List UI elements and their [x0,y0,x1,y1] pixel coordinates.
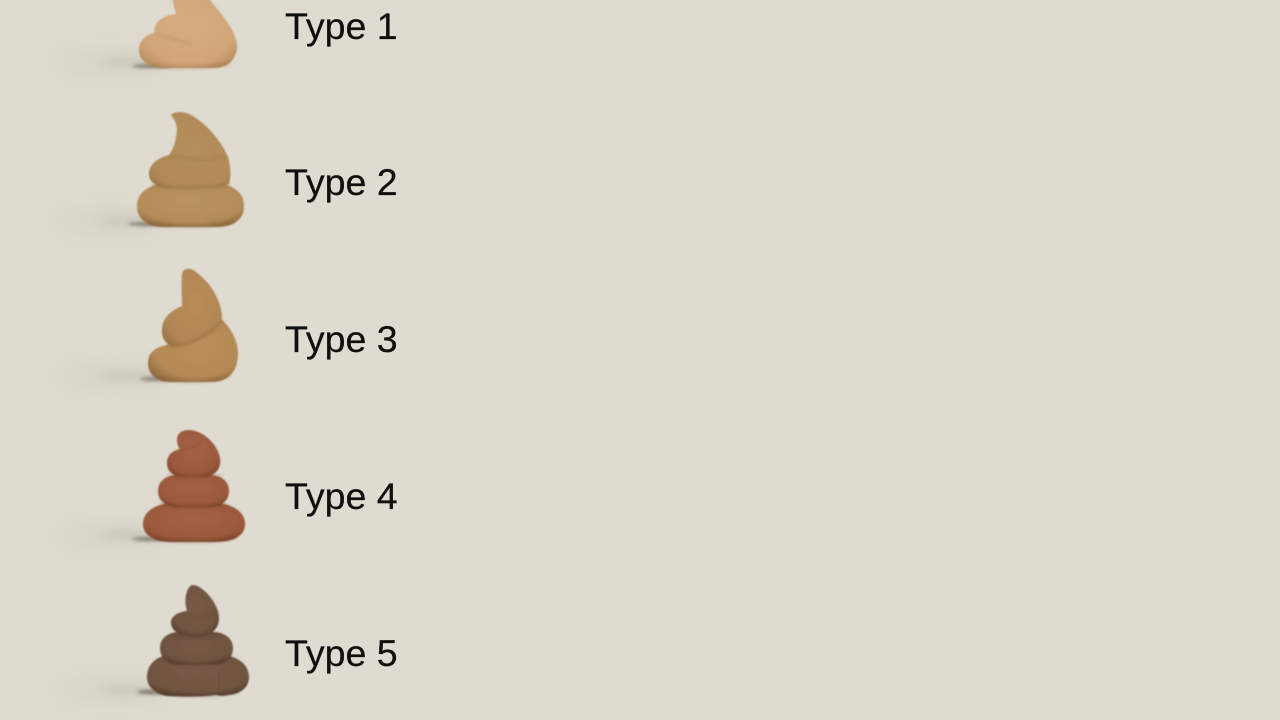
label: Type 5: Type 5 [285,632,398,674]
row: Type 3 [55,269,398,383]
row: Type 4 [57,430,398,542]
label: Type 4: Type 4 [285,475,398,517]
row: Type 5 [57,585,398,697]
icon: Type 2 stool [53,112,244,228]
row: Type 1 [55,0,398,69]
label: Type 3: Type 3 [285,318,398,360]
label: Type 2: Type 2 [285,161,398,203]
label: Type 1: Type 1 [285,5,398,47]
icon: Type 4 stool [57,430,245,542]
icon: Type 1 stool [55,0,237,69]
row: Type 2 [53,112,398,228]
icon: Type 5 stool [57,585,249,697]
icon: Type 3 stool [55,269,238,383]
